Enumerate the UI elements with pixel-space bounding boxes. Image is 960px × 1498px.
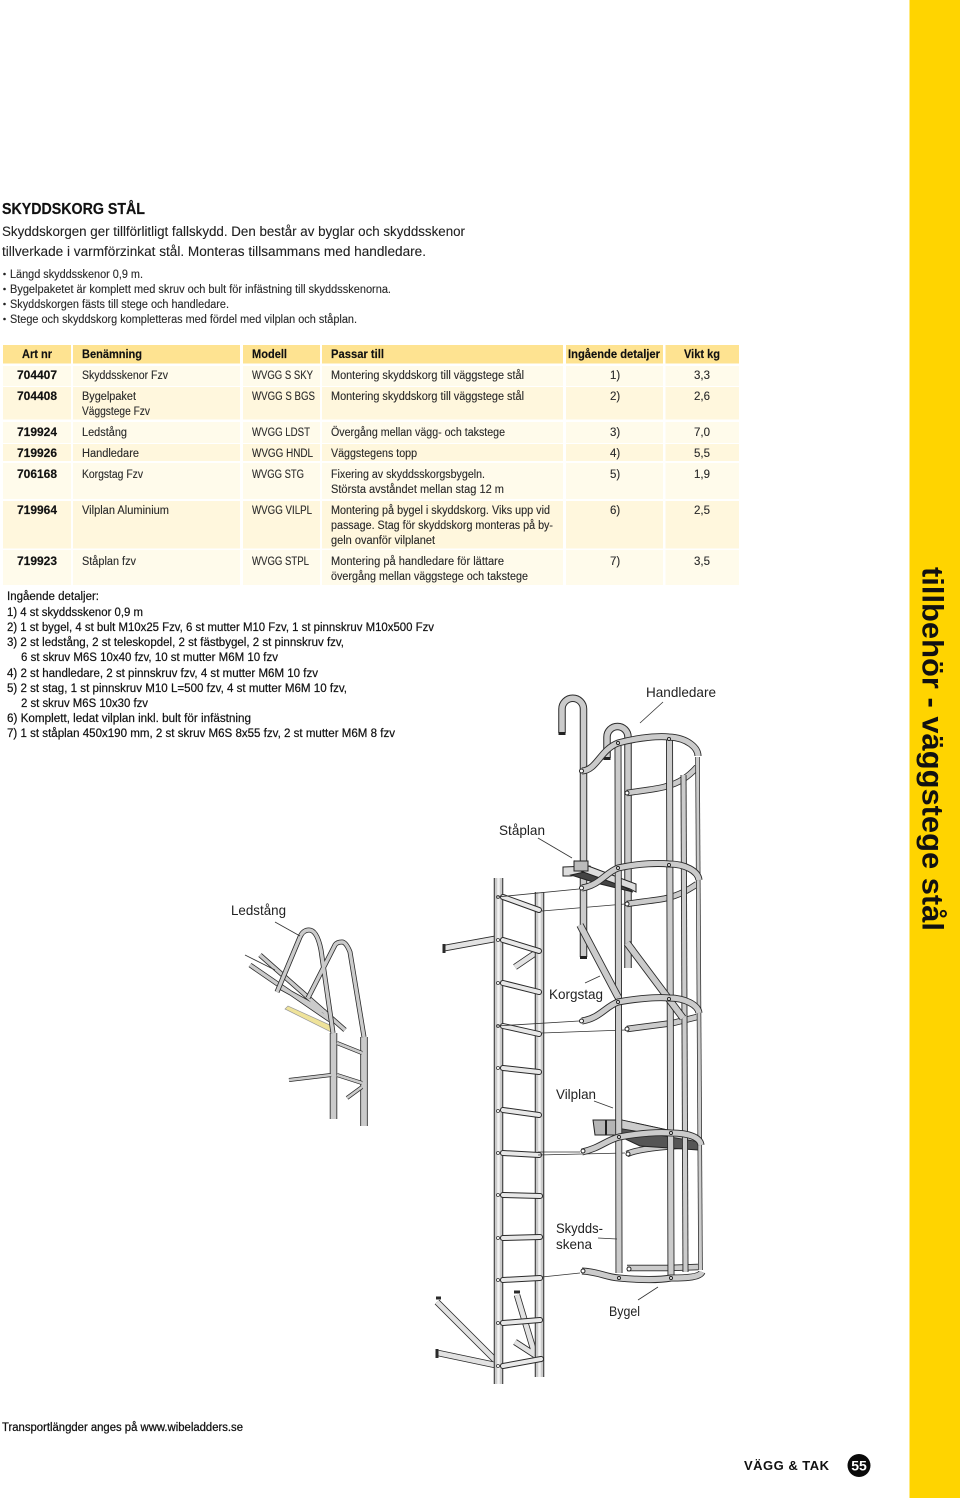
included parts list: 3) 2 st ledstång, 2 st teleskopdel, 2 st fästbygel, 2 st pinnskruv fzv, — [7, 637, 344, 649]
section label: VÄGG & TAK — [744, 1458, 830, 1473]
bullet list: Längd skyddsskenor 0,9 m. — [10, 269, 143, 281]
row 719923: övergång mellan väggstege och takstege — [331, 571, 528, 583]
row 719924: 3) — [610, 427, 620, 439]
callout: Korgstag — [549, 976, 603, 1002]
row 704407: Montering skyddskorg till väggstege stål — [331, 370, 524, 382]
row 704408: Bygelpaket — [82, 391, 137, 403]
row 704408: 704408 — [17, 389, 57, 403]
row 719964: 2,5 — [694, 505, 710, 517]
table header: Vikt kg — [684, 347, 720, 361]
title: SKYDDSKORG STÅL — [2, 201, 145, 218]
side band — [910, 0, 960, 1498]
row 706168: Korgstag Fzv — [82, 469, 143, 481]
row 719923 — [3, 550, 739, 585]
row 719923: 7) — [610, 556, 620, 568]
row 706168: 706168 — [17, 467, 57, 481]
row 704408: Väggstege Fzv — [82, 406, 150, 418]
ladder rungs — [503, 897, 541, 1366]
callout: Ledstang: Ledstång — [231, 902, 286, 918]
callout: Bygel — [609, 1287, 658, 1319]
callout: Vilplan — [556, 1086, 613, 1108]
included parts list: 5) 2 st stag, 1 st pinnskruv M10 L=500 fzv, 4 st mutter M6M 10 fzv, — [7, 683, 347, 695]
row 704408: 2) — [610, 391, 620, 403]
page number badge: 55 — [851, 1458, 867, 1474]
row 719924: 7,0 — [694, 427, 710, 439]
ledstang handrails — [277, 930, 364, 1037]
callout: Skyddsskena: Skydds- — [556, 1220, 603, 1236]
side title: tillbehör - väggstege stål — [916, 567, 948, 931]
row 719926 — [3, 444, 739, 461]
included parts list: 6 st skruv M6S 10x40 fzv, 10 st mutter M6M 10 fzv — [21, 652, 278, 664]
row 719964: 719964 — [17, 503, 57, 517]
row 706168: 1,9 — [694, 469, 710, 481]
callout: Korgstag: Korgstag — [549, 986, 603, 1002]
callout: Handledare: Handledare — [646, 684, 716, 700]
illustration: safety cage — [558, 698, 702, 1280]
platform: staplan — [563, 861, 636, 892]
ledstang ladder section — [289, 1033, 364, 1126]
callout: Handledare — [640, 684, 716, 723]
platform: vilplan — [593, 1119, 700, 1150]
skyddsskenor rails — [618, 740, 700, 1277]
row 719923: 719923 — [17, 554, 57, 568]
intro text: Skyddskorgen ger tillförlitligt fallskydd. Den består av byglar och skyddsskenor — [2, 224, 465, 239]
illustration: wall ladder — [436, 878, 541, 1384]
callout: Bygel: Bygel — [609, 1303, 640, 1319]
callout: Vilplan: Vilplan — [556, 1086, 596, 1102]
row 719964: 6) — [610, 505, 620, 517]
row 719924 — [3, 422, 739, 443]
callout: Ståplan — [499, 822, 572, 858]
korgstag — [580, 925, 683, 1018]
ledstang folded ladder — [245, 955, 345, 1032]
row 719964: WVGG VILPL — [252, 505, 313, 517]
row 719926: Handledare — [82, 448, 139, 460]
row 719923: Montering på handledare för lättare — [331, 556, 504, 568]
table header: Modell — [252, 347, 287, 361]
row 704407: 704407 — [17, 368, 57, 382]
row 704408: Montering skyddskorg till väggstege stål — [331, 391, 524, 403]
row 719964: geln ovanför vilplanet — [331, 535, 436, 547]
row 719924: 719924 — [17, 425, 57, 439]
included parts list — [7, 591, 434, 740]
platforms — [563, 861, 700, 1150]
row 719964: Vilplan Aluminium — [82, 505, 169, 517]
included parts list: 6) Komplett, ledat vilplan inkl. bult för infästning — [7, 713, 251, 725]
included parts list: 2) 1 st bygel, 4 st bult M10x25 Fzv, 6 st mutter M10 Fzv, 1 st pinnskruv M10x500 Fzv — [7, 622, 434, 634]
row 706168: Fixering av skyddsskorgsbygeln. — [331, 469, 485, 481]
row 706168 — [3, 463, 739, 499]
row 719924: Övergång mellan vägg- och takstege — [331, 427, 505, 439]
row 704407: Skyddsskenor Fzv — [82, 370, 168, 382]
bolts — [580, 738, 672, 1280]
table header — [3, 345, 739, 364]
row 719924: WVGG LDST — [252, 427, 310, 439]
row 704407: 1) — [610, 370, 620, 382]
included parts list: 1) 4 st skyddsskenor 0,9 m — [7, 607, 143, 619]
included parts list: 4) 2 st handledare, 2 st pinnskruv fzv, 4 st mutter M6M 10 fzv — [7, 668, 318, 680]
bullet list — [3, 269, 391, 326]
row 719926: 719926 — [17, 446, 57, 460]
bullet list: Skyddskorgen fästs till stege och handledare. — [10, 299, 229, 311]
row 704408: 2,6 — [694, 391, 710, 403]
table — [3, 345, 739, 585]
row 704407 — [3, 366, 739, 386]
back bands — [627, 767, 698, 1268]
row 719926: WVGG HNDL — [252, 448, 314, 460]
row 719924: Ledstång — [82, 427, 127, 439]
callout: Ståplan: Ståplan — [499, 822, 545, 838]
row 704407: WVGG S SKY — [252, 370, 313, 382]
row 719926: 5,5 — [694, 448, 710, 460]
row 719926: 4) — [610, 448, 620, 460]
row 719923: 3,5 — [694, 556, 710, 568]
row 719964: Montering på bygel i skyddskorg. Viks upp vid — [331, 505, 550, 517]
ladder rails — [498, 878, 540, 1384]
callout: Skyddsskena: skena — [556, 1236, 592, 1252]
included parts list: Ingående detaljer: — [7, 591, 99, 603]
table header: Art nr — [22, 347, 52, 361]
included parts list: 7) 1 st ståplan 450x190 mm, 2 st skruv M6S 8x55 fzv, 2 st mutter M6M 8 fzv — [7, 728, 395, 740]
ladder brackets — [436, 938, 537, 1365]
page number badge — [848, 1454, 870, 1477]
row 704408: WVGG S BGS — [252, 391, 315, 403]
row 719923: WVGG STPL — [252, 556, 310, 568]
illustration: ledstang — [245, 930, 364, 1126]
ladder holes — [496, 896, 500, 1368]
included parts list: 2 st skruv M6S 10x30 fzv — [21, 698, 148, 710]
callout: Skyddsskena — [556, 1220, 617, 1252]
bullet list: Bygelpaketet är komplett med skruv och bult för infästning till skyddsskenorna. — [10, 284, 391, 296]
row 706168: Största avståndet mellan stag 12 m — [331, 484, 504, 496]
table header: Ingående detaljer — [568, 347, 660, 361]
intro text: tillverkade i varmförzinkat stål. Monteras tillsammans med handledare. — [2, 244, 426, 259]
bygel rings — [582, 737, 702, 1280]
row 704408 — [3, 387, 739, 420]
table header: Passar till — [331, 347, 384, 361]
row 719964: passage. Stag för skyddskorg monteras på by- — [331, 520, 553, 532]
row 719923: Ståplan fzv — [82, 556, 136, 568]
column gaps — [71, 366, 666, 585]
intro text — [2, 224, 465, 259]
row 719964 — [3, 501, 739, 548]
row 706168: 5) — [610, 469, 620, 481]
row 706168: WVGG STG — [252, 469, 304, 481]
footnote: Transportlängder anges på www.wibeladders.se — [2, 1422, 243, 1434]
bullet list: Stege och skyddskorg kompletteras med fördel med vilplan och ståplan. — [10, 314, 357, 326]
assembly guide lines — [497, 889, 625, 1277]
handrails — [558, 698, 628, 968]
row 719926: Väggstegens topp — [331, 448, 417, 460]
table header: Benämning — [82, 347, 142, 361]
callout: Ledstang — [231, 902, 300, 936]
row 704407: 3,3 — [694, 370, 710, 382]
